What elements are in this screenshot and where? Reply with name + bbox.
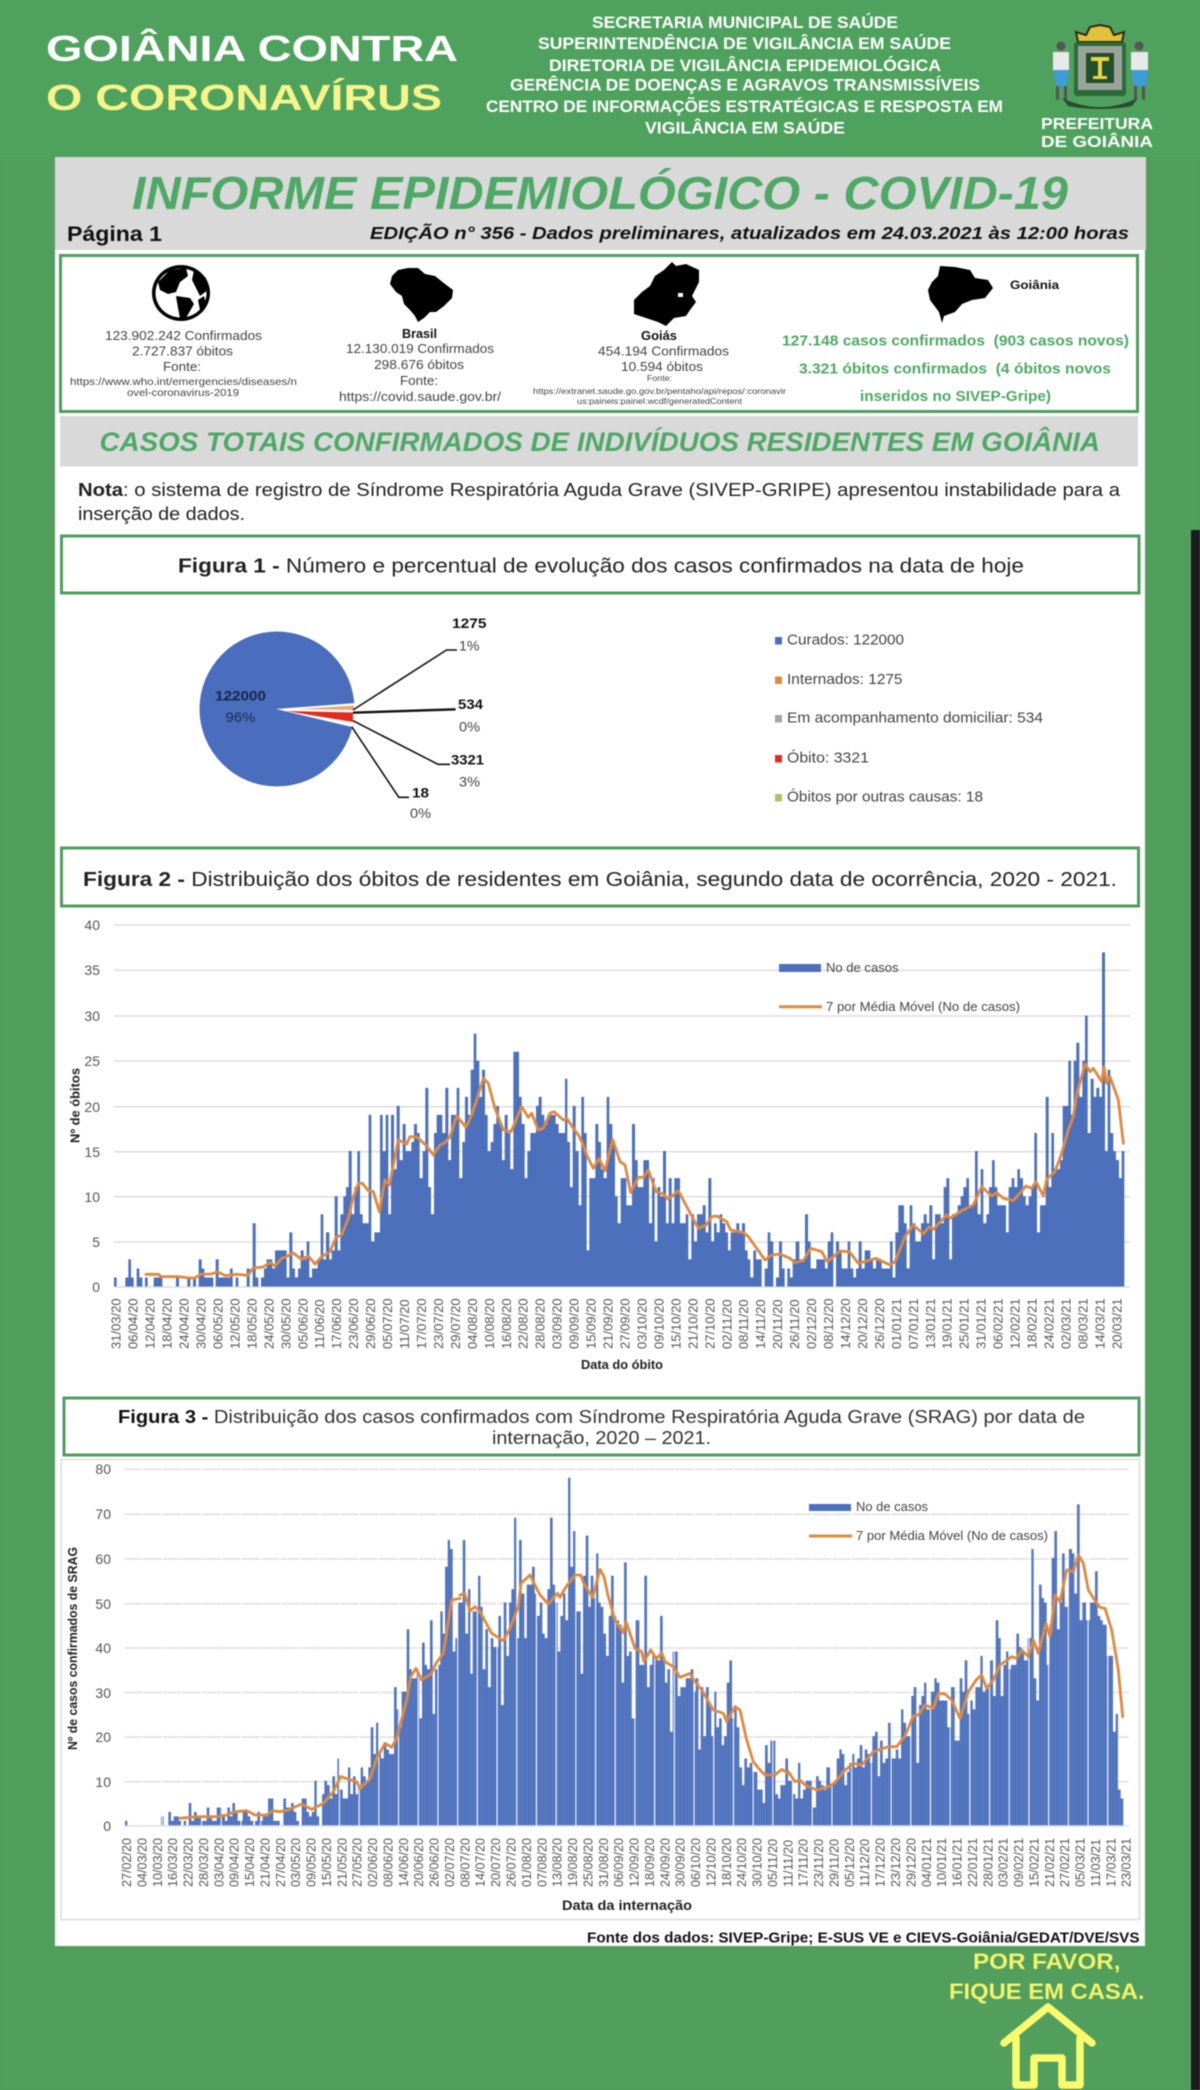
y axis title: Nº de casos confirmados de SRAG — [66, 1547, 80, 1750]
pie labels: 1275 — [452, 615, 487, 631]
x axis date labels: 16/08/20 — [499, 1298, 514, 1349]
x axis date labels: 28/03/20 — [197, 1838, 211, 1887]
x axis date labels: 17/07/20 — [414, 1298, 429, 1349]
x axis date labels: 20/12/20 — [855, 1298, 870, 1349]
x axis date labels: 11/12/20 — [858, 1839, 872, 1887]
x axis date labels: 29/12/20 — [904, 1838, 918, 1887]
x axis date labels: 24/04/20 — [176, 1298, 192, 1349]
chart legend: 7 por Média Móvel (No de casos) — [856, 1528, 1048, 1543]
x axis date labels: 11/11/20 — [781, 1840, 795, 1887]
x axis date labels: 23/06/20 — [346, 1298, 361, 1349]
x axis date labels: 03/05/20 — [289, 1838, 303, 1887]
x axis date labels: 22/03/20 — [182, 1838, 196, 1887]
header institutional text: VIGILÂNCIA EM SAÚDE — [645, 118, 845, 138]
x axis date labels: 21/02/21 — [1043, 1838, 1057, 1887]
icon: Goiás map — [634, 262, 699, 326]
figure 2 heading box: Figura 2 - Distribuição dos óbitos de residentes em Goiânia, segundo data de ocorrência, 2020 - 2021. — [83, 869, 1117, 891]
pie labels — [215, 615, 487, 821]
pie legend: Óbitos por outras causas: 18 — [787, 788, 983, 806]
x axis date labels: 25/01/21 — [957, 1298, 972, 1349]
x axis date labels: 22/01/21 — [966, 1838, 980, 1887]
x axis date labels: 03/04/20 — [212, 1838, 226, 1887]
Goiânia figures: 127.148 casos confirmados (903 casos novos) — [782, 334, 1129, 350]
y axis labels: 10 — [95, 1774, 111, 1790]
x axis date labels: 02/11/20 — [719, 1299, 734, 1349]
x axis date labels: 18/05/20 — [244, 1298, 259, 1349]
chart legend: 7 por Média Móvel (No de casos) — [826, 999, 1020, 1014]
x axis date labels: 10/01/21 — [935, 1838, 949, 1887]
x axis date labels: 29/07/20 — [448, 1298, 463, 1349]
x axis date labels: 31/03/20 — [109, 1298, 124, 1349]
y axis labels: 30 — [84, 1008, 100, 1024]
x axis date labels: 13/08/20 — [551, 1838, 565, 1887]
x axis date labels: 16/03/20 — [166, 1838, 180, 1887]
logo caption: PREFEITURA — [1041, 116, 1153, 133]
x axis date labels: 05/11/20 — [766, 1839, 780, 1887]
x axis date labels: 12/04/20 — [143, 1298, 158, 1349]
x axis date labels: 24/10/20 — [735, 1838, 749, 1887]
x axis date labels: 27/02/21 — [1058, 1838, 1072, 1887]
x axis date labels: 23/12/20 — [889, 1838, 903, 1887]
pie labels: 122000 — [215, 688, 266, 704]
chart legend: No de casos — [826, 960, 899, 975]
x axis date labels: 06/09/20 — [612, 1838, 626, 1887]
Goiás figures: https://extranet.saude.go.gov.br/pentaho/api/repos/:coronavir — [533, 386, 786, 396]
y axis labels: 20 — [84, 1099, 100, 1115]
figure 1 heading box: Figura 1 - Número e percentual de evolução dos casos confirmados na data de hoje — [178, 556, 1024, 578]
y axis labels: 20 — [95, 1729, 111, 1745]
y axis labels — [95, 1461, 111, 1834]
x axis date labels: 10/03/20 — [151, 1838, 165, 1887]
pie legend: Curados: 122000 — [787, 632, 904, 648]
x axis date labels: 17/03/21 — [1104, 1838, 1118, 1887]
pie legend — [775, 632, 1043, 806]
chart: SRAG cases per day — [61, 1460, 1140, 1920]
pie chart: case outcomes — [200, 615, 487, 821]
x axis date labels: 09/10/20 — [651, 1298, 666, 1349]
header title: Goiânia contra o coronavírus: GOIÂNIA CONTRA — [46, 27, 458, 69]
x axis date labels: 09/09/20 — [567, 1298, 582, 1349]
page label: Página 1 — [67, 223, 162, 246]
bars — [114, 952, 1124, 1286]
x axis date labels: 06/05/20 — [210, 1298, 226, 1349]
Goiás figures: us:paineis:painel.wcdf/generatedContent — [577, 396, 743, 406]
x axis date labels: 30/04/20 — [194, 1298, 208, 1349]
x axis date labels: 21/05/20 — [335, 1838, 349, 1887]
x axis date labels: 14/07/20 — [474, 1838, 488, 1887]
x axis date labels: 01/01/21 — [889, 1298, 904, 1349]
x axis date labels: 27/04/20 — [274, 1838, 288, 1887]
x axis date labels: 12/02/21 — [1008, 1298, 1023, 1349]
Goiás figures: 10.594 óbitos — [621, 359, 704, 374]
header institutional text: SECRETARIA MUNICIPAL DE SAÚDE — [592, 13, 898, 32]
Brazil figures: 12.130.019 Confirmados — [346, 341, 495, 356]
x axis date labels: 07/08/20 — [535, 1838, 549, 1887]
x axis date labels: 21/09/20 — [600, 1298, 616, 1349]
x axis date labels: 23/03/21 — [1120, 1838, 1134, 1887]
x axis date labels: 26/07/20 — [504, 1838, 518, 1887]
Brazil figures: Brasil — [402, 327, 437, 341]
y axis labels: 0 — [103, 1818, 111, 1834]
x axis date labels: 11/07/20 — [397, 1299, 412, 1349]
figure 1 heading box — [62, 536, 1139, 593]
x axis date labels: 24/05/20 — [261, 1298, 276, 1349]
x axis date labels: 14/11/20 — [753, 1299, 768, 1349]
x axis date labels: 20/03/21 — [1109, 1298, 1124, 1349]
Goiânia figures — [782, 334, 1129, 405]
panel: case totals by region — [60, 256, 1138, 412]
7-day moving average line — [179, 1555, 1123, 1818]
x axis date labels: 26/06/20 — [428, 1838, 442, 1887]
x axis date labels: 16/01/21 — [950, 1838, 964, 1887]
x axis date labels: 01/08/20 — [520, 1838, 534, 1887]
pie leader lines — [352, 650, 457, 797]
x axis date labels: 04/08/20 — [465, 1298, 480, 1349]
x axis date labels: 26/12/20 — [872, 1298, 887, 1349]
logo caption — [1041, 116, 1154, 151]
x axis date labels: 21/10/20 — [685, 1298, 700, 1349]
x axis date labels: 08/07/20 — [458, 1838, 472, 1887]
world figures — [70, 328, 297, 399]
header institutional text: GERÊNCIA DE DOENÇAS E AGRAVOS TRANSMISSÍVEIS — [510, 76, 980, 94]
x axis date labels: 08/12/20 — [821, 1298, 836, 1349]
y axis labels: 80 — [95, 1461, 111, 1477]
heading band: total confirmed cases — [60, 416, 1138, 466]
stay home message — [949, 1949, 1144, 2004]
pie labels: 534 — [458, 696, 483, 712]
x axis date labels: 06/02/21 — [991, 1298, 1006, 1349]
x axis date labels: 09/04/20 — [228, 1838, 242, 1887]
pie legend: Em acompanhamento domiciliar: 534 — [787, 710, 1043, 726]
x axis date labels: 02/07/20 — [443, 1838, 457, 1887]
Goiás figures: Fonte: — [647, 374, 672, 383]
7-day moving average line — [146, 1064, 1123, 1278]
y axis labels — [84, 917, 100, 1295]
Brazil figures: https://covid.saude.gov.br/ — [339, 389, 501, 404]
x axis date labels: 23/07/20 — [431, 1298, 446, 1349]
x axis date labels: 30/10/20 — [751, 1838, 765, 1887]
x axis date labels: 05/07/20 — [380, 1298, 395, 1349]
heading band: total confirmed cases: CASOS TOTAIS CONFIRMADOS DE INDIVÍDUOS RESIDENTES EM GOIÂNIA — [100, 426, 1100, 457]
x axis date labels: 18/02/21 — [1024, 1298, 1040, 1349]
Goiás figures: 454.194 Confirmados — [598, 344, 730, 358]
x axis date labels: 26/11/20 — [787, 1299, 802, 1349]
x axis date labels: 05/06/20 — [295, 1298, 310, 1349]
Goiás figures — [533, 329, 786, 406]
logo caption: DE GOIÂNIA — [1041, 132, 1154, 151]
x axis date labels: 07/01/21 — [906, 1298, 921, 1349]
x axis date labels: 03/02/21 — [997, 1838, 1011, 1887]
x axis date labels: 24/09/20 — [658, 1838, 672, 1887]
header institutional text — [486, 13, 1003, 138]
Goiás figures: Goiás — [641, 329, 677, 343]
chart: deaths per day — [68, 917, 1130, 1372]
bars — [125, 1478, 1123, 1825]
y axis labels: 10 — [84, 1189, 100, 1205]
x axis date labels: 15/10/20 — [668, 1298, 683, 1349]
text block: note: inserção de dados. — [78, 503, 245, 524]
x axis date labels: 20/06/20 — [412, 1838, 426, 1887]
x axis date labels: 14/03/21 — [1092, 1298, 1107, 1349]
x axis date labels: 09/05/20 — [305, 1838, 319, 1887]
icon: Brazil map — [390, 268, 453, 322]
x axis date labels: 05/12/20 — [843, 1838, 857, 1887]
x axis date labels: 30/09/20 — [674, 1838, 688, 1887]
pie labels: 18 — [412, 784, 429, 800]
bar gaps — [122, 1464, 1126, 1826]
x axis date labels: 30/05/20 — [278, 1298, 293, 1349]
x axis date labels: 17/11/20 — [797, 1839, 811, 1887]
x axis date labels: 12/05/20 — [227, 1298, 242, 1349]
heading: Informe Epidemiológico: INFORME EPIDEMIOLÓGICO - COVID-19 — [132, 167, 1068, 219]
world figures: Fonte: — [163, 359, 201, 374]
x axis date labels: 11/03/21 — [1089, 1839, 1103, 1887]
y axis labels: 0 — [92, 1279, 100, 1295]
x axis date labels: 12/09/20 — [628, 1838, 642, 1887]
header title: Goiânia contra o coronavírus — [46, 27, 458, 118]
x axis date labels: 15/09/20 — [584, 1298, 599, 1349]
Goiânia label: Goiânia — [1010, 278, 1059, 292]
x axis date labels: 23/11/20 — [812, 1839, 826, 1887]
x axis date labels: 08/03/21 — [1075, 1298, 1090, 1349]
icon: globe — [152, 265, 210, 321]
Goiânia figures: 3.321 óbitos confirmados (4 óbitos novos — [799, 362, 1111, 378]
icon: Goiânia map — [928, 266, 993, 323]
x axis date labels: 31/01/21 — [974, 1298, 989, 1349]
x axis date labels: 27/09/20 — [618, 1298, 632, 1349]
header institutional text: CENTRO DE INFORMAÇÕES ESTRATÉGICAS E RESPOSTA EM — [486, 96, 1003, 116]
x axis date labels: 10/08/20 — [482, 1298, 497, 1349]
x axis date labels: 20/07/20 — [489, 1838, 503, 1887]
stay home message: FIQUE EM CASA. — [949, 1979, 1144, 2004]
x axis date labels: 04/01/21 — [920, 1838, 934, 1887]
x axis date labels: 15/05/20 — [320, 1838, 334, 1887]
y axis labels: 35 — [84, 962, 100, 978]
pie labels: 0% — [410, 805, 431, 821]
x axis date labels: 17/06/20 — [329, 1298, 344, 1349]
figure 3 heading box: Figura 3 - Distribuição dos casos confirmados com Síndrome Respiratória Aguda Grave (SRAG) por data de — [118, 1406, 1085, 1427]
x axis date labels: 27/02/20 — [120, 1838, 134, 1887]
x axis date labels: 28/01/21 — [981, 1838, 995, 1887]
x axis date labels: 25/08/20 — [581, 1838, 595, 1887]
x axis date labels: 19/08/20 — [566, 1838, 580, 1887]
pie legend: Internados: 1275 — [787, 672, 902, 688]
icon: house — [1004, 2007, 1092, 2085]
world figures: 123.902.242 Confirmados — [105, 328, 263, 343]
y axis labels: 40 — [95, 1640, 111, 1656]
x axis date labels: 11/06/20 — [312, 1299, 327, 1349]
stay home message: POR FAVOR, — [973, 1949, 1120, 1974]
world figures: https://www.who.int/emergencies/diseases/n — [70, 376, 297, 388]
x axis date labels: 03/09/20 — [550, 1298, 565, 1349]
y axis labels: 50 — [95, 1596, 111, 1612]
x axis date labels: 22/08/20 — [516, 1298, 531, 1349]
x axis date labels: 27/05/20 — [351, 1838, 365, 1887]
x axis title: Data do óbito — [581, 1357, 663, 1372]
x axis date labels — [109, 1298, 1124, 1349]
x axis date labels: 28/08/20 — [533, 1298, 548, 1349]
y axis title: Nº de óbitos — [68, 1068, 82, 1143]
Brazil figures: Fonte: — [400, 373, 438, 388]
y axis labels: 70 — [95, 1506, 111, 1522]
x axis date labels: 18/09/20 — [643, 1838, 657, 1887]
y axis labels: 15 — [84, 1144, 100, 1160]
Goiânia figures: inseridos no SIVEP-Gripe) — [860, 389, 1051, 405]
x axis date labels: 02/03/21 — [1058, 1298, 1074, 1349]
world figures: 2.727.837 óbitos — [132, 344, 234, 358]
x axis date labels: 08/11/20 — [736, 1299, 751, 1349]
header institutional text: SUPERINTENDÊNCIA DE VIGILÂNCIA EM SAÚDE — [538, 34, 951, 53]
x axis date labels: 03/10/20 — [634, 1298, 650, 1349]
x axis date labels: 24/02/21 — [1042, 1298, 1056, 1349]
x axis date labels: 18/10/20 — [720, 1838, 734, 1887]
figure 3 heading box — [64, 1398, 1139, 1455]
y axis labels: 30 — [95, 1685, 111, 1701]
x axis date labels: 31/08/20 — [597, 1838, 611, 1887]
x axis date labels: 06/10/20 — [689, 1838, 703, 1887]
x axis date labels: 14/06/20 — [397, 1838, 411, 1887]
Brazil figures: 298.676 óbitos — [374, 357, 465, 372]
data source note: Fonte dos dados: SIVEP-Gripe; E-SUS VE e CIEVS-Goiânia/GEDAT/DVE/SVS — [587, 1930, 1140, 1946]
x axis date labels: 13/01/21 — [923, 1298, 938, 1349]
y axis labels: 60 — [95, 1551, 111, 1567]
chart legend — [779, 960, 1020, 1014]
x axis date labels — [120, 1838, 1134, 1887]
x axis date labels: 17/12/20 — [874, 1838, 888, 1887]
header institutional text: DIRETORIA DE VIGILÂNCIA EPIDEMIOLÓGICA — [549, 56, 941, 75]
x axis date labels: 29/11/20 — [828, 1839, 842, 1887]
chart legend: No de casos — [856, 1499, 928, 1514]
x axis date labels: 09/02/21 — [1012, 1838, 1026, 1887]
logo: Prefeitura de Goiânia coat of arms — [1053, 25, 1148, 109]
text block: note — [78, 479, 1121, 524]
x axis date labels: 19/01/21 — [940, 1298, 955, 1349]
figure 3 heading box: internação, 2020 – 2021. — [492, 1427, 711, 1448]
x axis date labels: 27/10/20 — [702, 1298, 717, 1349]
y axis labels: 40 — [84, 917, 100, 933]
pie labels: 0% — [459, 718, 480, 734]
header title: Goiânia contra o coronavírus: O CORONAVÍRUS — [46, 77, 442, 118]
pie labels: 1% — [459, 638, 480, 654]
y axis labels: 5 — [92, 1234, 100, 1250]
x axis date labels: 04/03/20 — [135, 1838, 149, 1887]
x axis date labels: 14/12/20 — [838, 1298, 853, 1349]
x axis date labels: 21/04/20 — [258, 1838, 272, 1887]
pie labels: 96% — [226, 709, 256, 725]
figure 2 heading box — [62, 848, 1138, 906]
x axis date labels: 02/12/20 — [804, 1298, 819, 1349]
x axis date labels: 05/03/21 — [1074, 1838, 1088, 1887]
x axis date labels: 20/11/20 — [770, 1299, 785, 1349]
chart legend — [809, 1499, 1048, 1543]
y axis labels: 25 — [84, 1053, 100, 1069]
pie labels: 3% — [459, 774, 480, 790]
pie labels: 3321 — [451, 752, 484, 768]
x axis date labels: 08/06/20 — [382, 1838, 396, 1887]
pie legend: Óbito: 3321 — [787, 750, 869, 766]
x axis date labels: 18/04/20 — [160, 1298, 175, 1349]
x axis date labels: 02/06/20 — [366, 1838, 380, 1887]
x axis date labels: 12/10/20 — [704, 1838, 718, 1887]
world figures: ovel-coronavirus-2019 — [127, 387, 239, 399]
x axis date labels: 29/06/20 — [363, 1298, 378, 1349]
x axis date labels: 15/04/20 — [243, 1838, 257, 1887]
Brazil figures — [339, 327, 501, 404]
x axis date labels: 06/04/20 — [126, 1298, 141, 1349]
main white panel — [55, 250, 1145, 1946]
edition line: EDIÇÃO n° 356 - Dados preliminares, atualizados em 24.03.2021 às 12:00 horas — [370, 222, 1129, 243]
text block: note: Nota: o sistema de registro de Síndrome Respiratória Aguda Grave (SIVEP-GRIPE) apresentou instabilidade para a — [78, 479, 1121, 500]
x axis title: Data da internação — [562, 1897, 692, 1913]
panel: report title band — [55, 157, 1146, 250]
x axis date labels: 15/02/21 — [1027, 1838, 1041, 1887]
